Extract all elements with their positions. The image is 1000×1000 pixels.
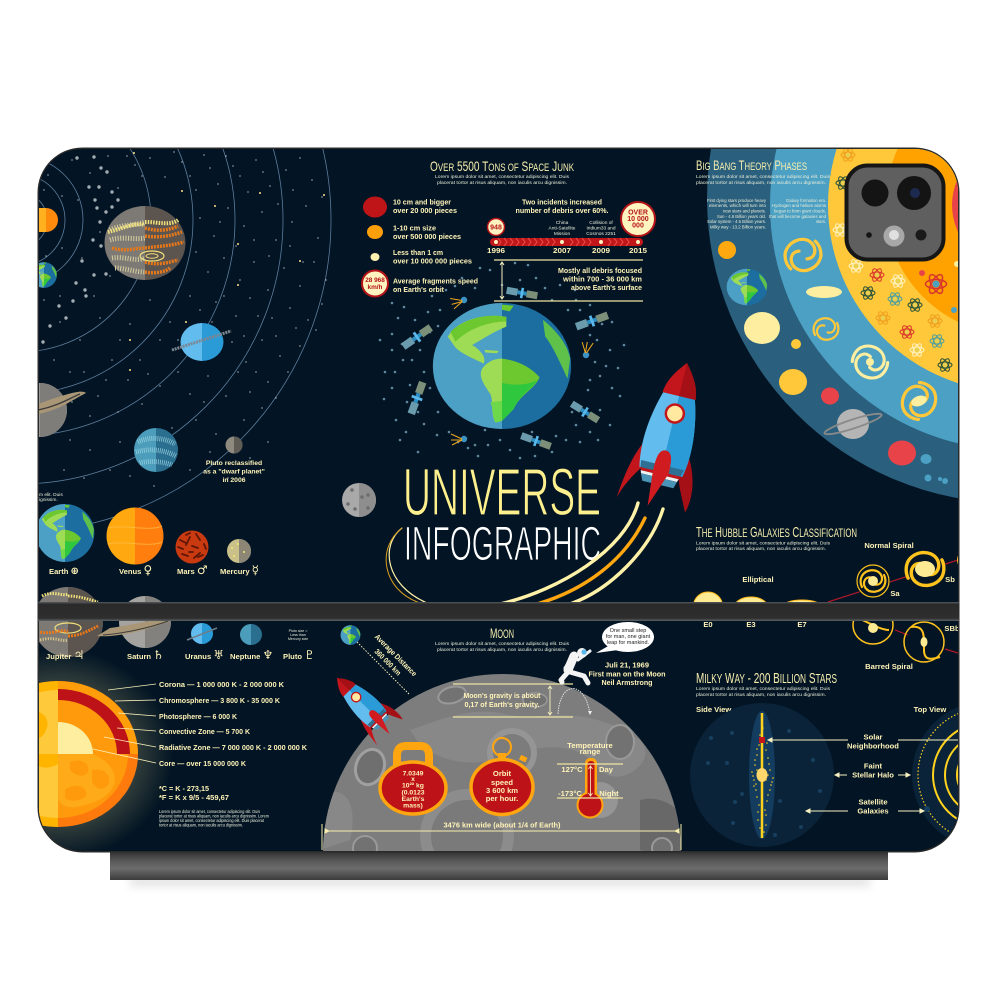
text: pluto note: Pluto size = [289, 629, 307, 633]
panel: solar system orbits [39, 149, 332, 524]
barred sequence line [895, 630, 958, 653]
text: sun layers: Corona — 1 000 000 K - 2 000 000 K [159, 680, 284, 689]
satellites [400, 285, 610, 451]
title: universe: UNIVERSE [403, 455, 601, 530]
text: galaxy phase [769, 198, 827, 225]
planet: saturn [39, 383, 86, 437]
debris altitude range: above Earth's surface [571, 283, 642, 292]
label: earth: Earth ⊕ [49, 566, 79, 577]
text: lorem fragment: m elit. Duis [39, 492, 63, 498]
label: SBb: SBb [944, 624, 960, 633]
legend: 10 cm debris: over 20 000 pieces [393, 206, 457, 215]
callout: fragment speed [362, 270, 478, 296]
text: space junk intro: Lorem ipsum dolor sit amet, consectetur adipiscing elit. Duis [435, 174, 570, 180]
planet: jupiter [104, 206, 186, 280]
screen background [39, 149, 958, 851]
label: normal spiral: Normal Spiral [864, 541, 914, 550]
text: sun lorem: Lorem ipsum dolor sit amet, consectetur adipiscing elit. Duis [159, 809, 260, 815]
text: pluto reclassified [203, 460, 264, 482]
moon small [342, 483, 376, 517]
device shadow [130, 876, 870, 886]
stopwatch: orbit speed: per hour. [486, 794, 518, 803]
timeline: Collision of [589, 220, 613, 226]
asteroid belt [43, 157, 118, 342]
text: space junk intro [435, 174, 569, 185]
planet: mars [176, 530, 208, 564]
timeline: China [556, 220, 569, 226]
text: temperature formulas [159, 784, 229, 802]
legend: 1-10 cm debris: over 500 000 pieces [393, 232, 461, 241]
heading: moon: MOON [490, 625, 514, 641]
text: sun lorem: ipsum dolor sit amet, consectetur adipiscing elit. Duis placerat [159, 818, 265, 824]
text: galaxy phase: Galaxy formation era. [786, 198, 826, 204]
timeline: Iridium33 and [586, 226, 616, 232]
text: two incidents [516, 199, 608, 213]
text: pluto note: Mercury size [288, 637, 308, 641]
panel: upper cover artwork [39, 149, 958, 602]
thermometer: temperature range: Day [599, 765, 614, 774]
timeline: Anti-Satellite [549, 226, 576, 232]
galaxy: Sa [856, 564, 890, 598]
text: sun lorem: placerat tortor at risus aliquam, non iaculis arcu dignissim. Lorem [159, 814, 269, 820]
planet: neptune [134, 428, 178, 472]
timeline: 2015 [629, 246, 648, 255]
big bang objects: atoms [833, 147, 960, 373]
thermometer: temperature range: 127°C [561, 765, 583, 774]
timeline: 1996 [487, 246, 505, 255]
big bang objects: outer ring [718, 241, 948, 484]
kettlebell: mass: 10²² kg [402, 782, 424, 790]
panel: lower cover artwork [0, 587, 1000, 1000]
thermometer: temperature range [557, 741, 623, 818]
text: hubble intro: placerat tortor at risus aliquam, non iaculis arcu dignissim. [696, 546, 826, 552]
label: pluto: Pluto ♇ [283, 648, 315, 662]
panel: screen artwork [39, 149, 958, 851]
text: sun lorem: tortor at risus aliquam, non iaculis arcu dignissim. [159, 822, 243, 828]
text: moon intro: placerat tortor at risus aliquam, non iaculis arcu dignissim. [437, 647, 567, 653]
timeline [487, 220, 648, 255]
sun leader lines [93, 684, 156, 763]
label: faint stellar halo: Faint [864, 762, 883, 770]
rocket small [323, 665, 404, 746]
gravity callout: Moon's gravity is about [464, 691, 541, 700]
kettlebell: mass: (0.0123 [401, 790, 425, 796]
label: E0: E0 [703, 620, 713, 629]
label: neptune: Neptune ♆ [230, 648, 273, 662]
text: star phase: Milky way - 13.2 Billion years. [710, 224, 766, 230]
label: faint stellar halo [835, 762, 910, 780]
timeline: 2007 [553, 246, 571, 255]
moon width dimension [322, 820, 681, 850]
kettlebell: mass: Earth's [402, 796, 425, 803]
label: side view: Side View [696, 705, 731, 714]
debris altitude range: within 700 - 36 000 km [562, 274, 642, 284]
planet: neptune [240, 624, 262, 645]
text: sun layers: Radiative Zone — 7 000 000 K - 2 000 000 K [159, 743, 307, 752]
label: solar neighborhood: Solar [864, 732, 883, 742]
timeline: 2009 [592, 246, 610, 255]
text: two incidents: Two incidents increased [522, 198, 602, 206]
callout: fragment speed: km/h [368, 284, 383, 291]
label: uranus: Uranus ♅ [185, 648, 224, 662]
debris altitude range: Mostly all debris focused [558, 266, 642, 275]
text: star phase: Sun - 4.6 Billion years old. [717, 214, 766, 220]
speech bubble: One small step [610, 628, 646, 634]
text: average distance: Average Distance [373, 632, 419, 678]
label: mars: Mars ♂ [177, 563, 208, 577]
planet: mercury [227, 539, 251, 563]
text: milky way intro: placerat tortor at risus aliquam, non iaculis arcu dignissim. [696, 692, 826, 698]
planet: jupiter bottom half [33, 587, 103, 657]
planet: venus [106, 508, 164, 564]
kettlebell: mass: x [411, 776, 415, 783]
text: star phase: First dying stars produce heavy [707, 198, 767, 204]
heading: hubble: THE HUBBLE GALAXIES CLASSIFICATION [696, 525, 857, 541]
kettlebell: mass: 7.0349 [403, 770, 424, 778]
label: venus: Venus ♀ [119, 563, 152, 577]
text: galaxy phase: stars. [816, 219, 826, 225]
text: temperature formulas: *F = K x 9/5 - 459,67 [159, 793, 229, 802]
text: moon intro: Lorem ipsum dolor sit amet, consectetur adipiscing elit. Duis [435, 641, 570, 647]
legend: 10 cm debris [363, 196, 457, 218]
speech bubble: leap for mankind. [607, 640, 650, 646]
text: big bang intro [696, 174, 831, 186]
label: mercury: Mercury ☿ [220, 563, 259, 577]
legend: 1-10 cm debris [367, 225, 461, 240]
moon width dimension: 3476 km wide (about 1/4 of Earth) [444, 820, 561, 830]
text: armstrong: Neil Armstrong [602, 678, 653, 687]
timeline: Cosmos 2251 [586, 231, 616, 237]
milky way top view [912, 702, 1000, 848]
galaxy: Sb [905, 549, 945, 589]
planet: saturn [97, 596, 172, 648]
kettlebell: mass: mass) [403, 802, 423, 810]
text: sun layers: Convective Zone — 5 700 K [159, 727, 250, 736]
device frame [38, 148, 960, 852]
gravity callout [453, 684, 592, 717]
label: satellite galaxies: Galaxies [857, 806, 889, 816]
callout: over 10 000 000: 000 [632, 222, 644, 230]
elliptical galaxies [694, 592, 822, 620]
label: Sb: Sb [945, 575, 955, 584]
rocket trails [386, 503, 663, 604]
label: elliptical: Elliptical [742, 575, 774, 584]
panel: big bang rings [707, 0, 1000, 503]
kettlebell: mass [380, 746, 446, 814]
stars field [44, 152, 326, 486]
debris altitude range [494, 260, 643, 301]
text: sun layers [159, 680, 307, 768]
sun stub [38, 208, 58, 232]
milky way side view [690, 703, 834, 847]
astronaut [561, 648, 590, 683]
text: pluto note: Less than [290, 633, 306, 637]
hinge band [38, 602, 959, 621]
heading: big bang: BIG BANG THEORY PHASES [696, 158, 807, 173]
galaxy: SBa [853, 606, 893, 644]
label: top view: Top View [914, 705, 946, 714]
planet: earth small [39, 262, 57, 288]
stopwatch: orbit speed: Orbit [493, 769, 512, 778]
text: milky way intro [696, 686, 831, 698]
text: lorem fragment 2: ignissim. [39, 497, 58, 503]
colored stars [130, 153, 324, 370]
earth mini [341, 625, 360, 645]
planet: pluto [226, 436, 242, 454]
planet: earth [36, 504, 94, 562]
text: pluto note [288, 629, 308, 641]
gravity callout: 0,17 of Earth's gravity. [464, 700, 540, 709]
speech bubble [596, 622, 654, 653]
thermometer: temperature range: range [580, 747, 600, 756]
callout: fragment speed: Average fragments speed [393, 276, 478, 286]
callout: fragment speed: on Earth's orbit [393, 285, 444, 294]
callout: over 10 000 000: OVER [628, 210, 648, 216]
stopwatch: orbit speed: speed [491, 778, 513, 787]
galaxy: SBb [904, 622, 944, 662]
stopwatch: orbit speed: 3 600 km [486, 786, 518, 795]
thermometer: temperature range: Temperature [567, 741, 613, 750]
callout: 948: 948 [490, 224, 502, 232]
text: sun layers: Core — over 15 000 000 K [159, 759, 246, 768]
text: galaxy phase: Hydrogen and helium atoms [772, 203, 827, 209]
text: star phase: Solar system - 4.5 Billion years. [707, 219, 766, 225]
text: milky way intro: Lorem ipsum dolor sit amet, consectetur adipiscing elit. Duis [696, 686, 831, 692]
text: two incidents: number of debris over 60%. [516, 206, 608, 215]
planet: uranus [172, 323, 231, 361]
text: pluto reclassified: Pluto reclassified [206, 460, 262, 467]
sun glow [0, 649, 173, 859]
text: galaxy phase: that will become galaxies and [769, 214, 826, 220]
text: hubble intro [696, 540, 831, 552]
text: moon intro [435, 641, 570, 653]
label: solar neighborhood: Neighborhood [847, 742, 899, 750]
text: temperature formulas: *C = K - 273,15 [159, 784, 210, 793]
text: armstrong [588, 660, 666, 687]
label: jupiter: Jupiter ♃ [46, 648, 84, 662]
callout: over 10 000 000: 10 000 [627, 216, 649, 223]
legend: small debris: over 10 000 000 pieces [393, 256, 472, 266]
label: solar neighborhood [768, 732, 958, 750]
text: sun layers: Photosphere — 6 000 K [159, 712, 237, 721]
text: armstrong: Juli 21, 1969 [605, 660, 649, 670]
text: big bang intro: placerat tortor at risus aliquam, non iaculis arcu dignissim. [696, 180, 826, 186]
text: star phase: new stars and planets. [723, 208, 766, 214]
legend: small debris: Less than 1 cm [393, 248, 443, 257]
planet: jupiter top half [39, 587, 98, 602]
moon body [320, 674, 690, 1000]
text: hubble intro: Lorem ipsum dolor sit amet, consectetur adipiscing elit. Duis [696, 540, 831, 546]
text: sun layers: Chromosphere — 3 800 K - 35 000 K [159, 696, 280, 705]
thermometer: temperature range: -173°C [558, 789, 582, 798]
hubble sequence line [828, 560, 958, 602]
sun cross-section [0, 681, 138, 827]
thermometer: temperature range: Night [599, 789, 619, 798]
timeline: Mission [554, 231, 570, 237]
legend: small debris [370, 250, 472, 265]
rocket large [616, 354, 721, 515]
planet: saturn top [128, 596, 162, 602]
label: E7: E7 [797, 620, 807, 629]
debris dots [380, 263, 624, 458]
label: faint stellar halo: Stellar Halo [852, 770, 894, 780]
text: big bang intro: Lorem ipsum dolor sit amet, consectetur adipiscing elit. Duis [696, 174, 831, 180]
distance arrow [357, 642, 409, 694]
stopwatch: orbit speed [471, 738, 533, 814]
callout: 948 [488, 218, 504, 236]
legend: 10 cm debris: 10 cm and bigger [393, 198, 451, 206]
title: infographic: INFOGRAPHIC [404, 518, 601, 571]
label: satellite galaxies [806, 798, 924, 816]
label: saturn: Saturn ♄ [127, 648, 164, 662]
heading: milky way: MILKY WAY - 200 BILLION STARS [696, 670, 837, 687]
text: pluto reclassified: in 2006 [222, 477, 246, 484]
text: star phase: elements, which will turn into [709, 203, 766, 209]
earth with continents [433, 303, 571, 429]
text: sun lorem [159, 809, 269, 828]
text: armstrong: First man on the Moon [588, 670, 666, 678]
big bang objects: galaxies [781, 234, 942, 425]
label: satellite galaxies: Satellite [858, 798, 888, 806]
galaxy: Sc stub [957, 551, 973, 569]
keyboard base bar [110, 851, 888, 880]
heading: space junk: OVER 5500 TONS OF SPACE JUNK [430, 158, 574, 174]
label: E3: E3 [746, 620, 756, 629]
text: pluto reclassified: as a "dwarf planet" [203, 468, 265, 476]
speech bubble: for man, one giant [606, 634, 651, 640]
callout: fragment speed: 28 968 [365, 277, 385, 284]
legend: 1-10 cm debris: 1-10 cm size [393, 224, 436, 232]
label: Sa: Sa [890, 589, 900, 598]
callout: over 10 000 000 [621, 202, 655, 236]
text: star phase [707, 198, 767, 230]
text: average distance: 360 000 km [373, 647, 403, 678]
camera module [846, 166, 944, 260]
text: space junk intro: placerat tortor at risus aliquam, non iaculis arcu dignissim. [437, 180, 567, 186]
planet: uranus [187, 623, 217, 644]
text: galaxy phase: began to form giant clouds, [774, 208, 826, 214]
label: barred spiral: Barred Spiral [865, 662, 913, 671]
